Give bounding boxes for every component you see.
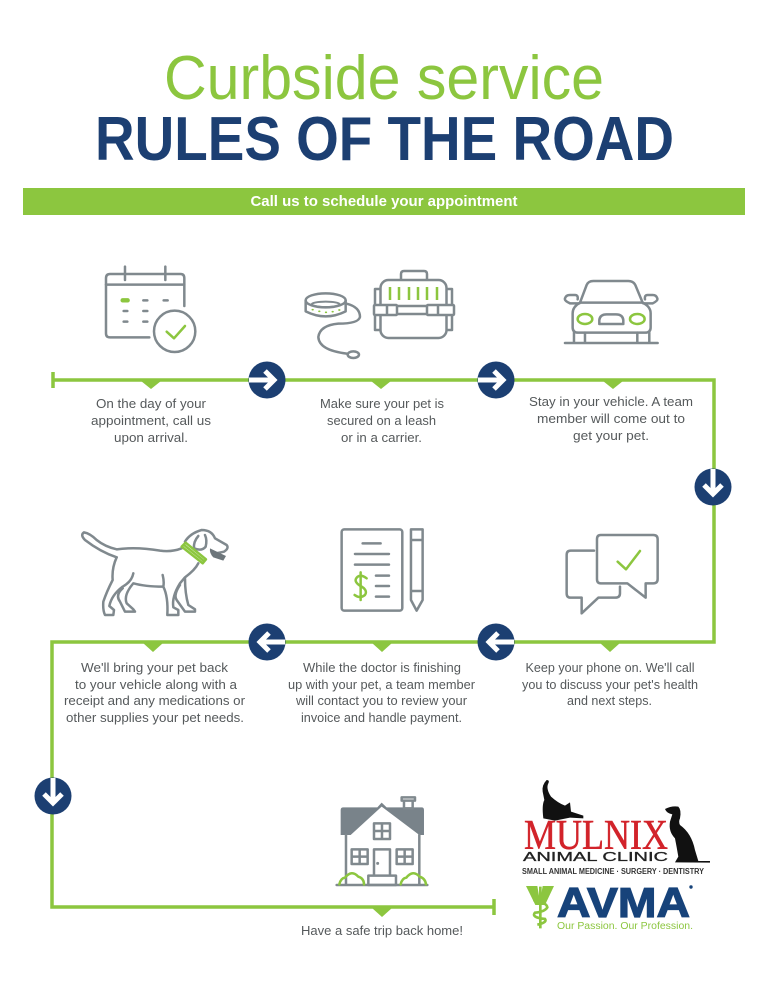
- logo: AVMA: [526, 879, 693, 932]
- text: step 6: [64, 660, 246, 725]
- text: step 1: [91, 396, 212, 445]
- title: Curbside service: [164, 44, 604, 113]
- text: step 5: up with your pet, a team member: [288, 677, 476, 692]
- text: step 2: Make sure your pet is: [320, 396, 444, 411]
- text: step 2: or in a carrier.: [341, 430, 422, 445]
- icon: car: [565, 281, 658, 343]
- title: [95, 44, 674, 174]
- arrow: left 1: [478, 624, 514, 660]
- text: step 6: other supplies your pet needs.: [66, 710, 244, 725]
- icon: collar and leash: [306, 293, 360, 358]
- logo: Mulnix Animal Clinic: ANIMAL CLINIC: [523, 849, 668, 864]
- text: step 4: you to discuss your pet's health: [522, 677, 698, 692]
- banner: [23, 188, 745, 215]
- arrow: right 2: [478, 362, 514, 398]
- text: step 1: On the day of your: [96, 396, 207, 411]
- route line: [52, 372, 714, 915]
- text: step 4: and next steps.: [567, 693, 652, 708]
- text: step 2: [320, 396, 444, 445]
- text: step 3: [529, 394, 693, 443]
- arrow: right 1: [248, 362, 286, 398]
- text: step 6: receipt and any medications or: [64, 693, 246, 708]
- banner: Call us to schedule your appointment: [250, 193, 518, 210]
- arrow: down 1: [694, 468, 732, 506]
- icon: calendar: [106, 267, 195, 352]
- arrow: down 2: [34, 778, 72, 814]
- text: step 4: Keep your phone on. We'll call: [526, 660, 695, 675]
- text: step 6: to your vehicle along with a: [75, 677, 238, 692]
- icon: invoice and pencil: [342, 529, 423, 611]
- text: step 3: member will come out to: [537, 411, 685, 426]
- text: step 6: We'll bring your pet back: [81, 660, 229, 675]
- title: RULES OF THE ROAD: [95, 104, 674, 174]
- logo: AVMA: Our Passion. Our Profession.: [557, 921, 693, 932]
- text: step 5: [288, 660, 476, 725]
- logo: AVMA: AVMA: [557, 879, 690, 926]
- logo: Mulnix Animal Clinic: MULNIX: [524, 813, 668, 859]
- text: step 3: get your pet.: [573, 428, 649, 443]
- arrow: left 2: [248, 624, 286, 660]
- text: step 7: Have a safe trip back home!: [301, 923, 463, 938]
- icon: pet carrier: [374, 271, 454, 338]
- text: step 5: While the doctor is finishing: [303, 660, 461, 675]
- icon: speech bubbles: [567, 535, 658, 613]
- text: step 1: appointment, call us: [91, 413, 212, 428]
- text: step 4: [522, 660, 698, 708]
- logo: Mulnix Animal Clinic: [522, 780, 710, 876]
- text: step 1: upon arrival.: [114, 430, 188, 445]
- text: step 5: will contact you to review your: [295, 693, 468, 708]
- text: step 5: invoice and handle payment.: [301, 710, 462, 725]
- text: step 3: Stay in your vehicle. A team: [529, 394, 693, 409]
- step markers: [141, 381, 623, 917]
- icon: dog: [82, 530, 228, 615]
- text: step 2: secured on a leash: [327, 413, 436, 428]
- logo: Mulnix Animal Clinic: SMALL ANIMAL MEDICINE · SURGERY · DENTISTRY: [522, 867, 705, 876]
- icon: house: [337, 797, 427, 885]
